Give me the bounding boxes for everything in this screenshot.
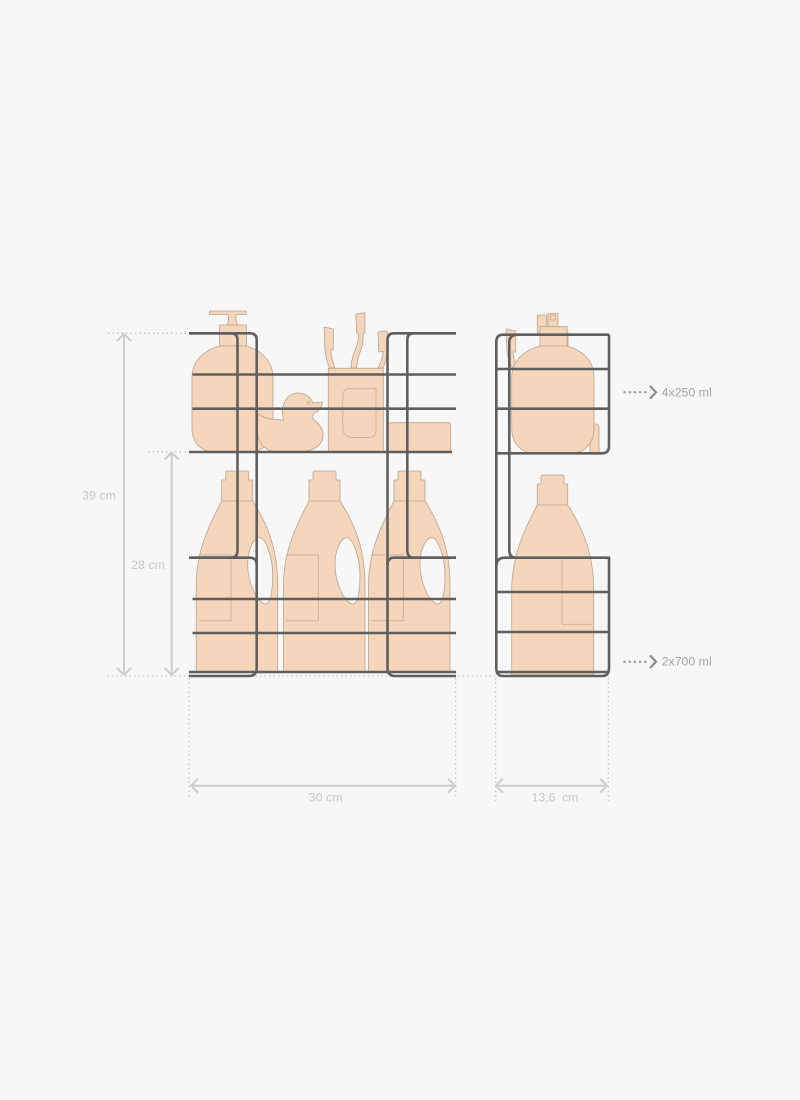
callout: 4x250 ml [624, 386, 712, 399]
icon: soap dispenser [192, 311, 273, 452]
icon: right detergent bottle [368, 471, 450, 672]
icon: side soap dispenser [512, 314, 594, 453]
front view wire rack [189, 333, 456, 676]
icon: side toothbrush and soap [506, 329, 599, 453]
dimension: 13,6 cm depth: 13,6 cm [532, 793, 578, 805]
callout: 2x700 ml [624, 655, 712, 669]
callout: 2x700 ml: 2x700 ml [662, 657, 712, 669]
dimension: 30 cm width: 30 cm [309, 793, 343, 805]
icon: side detergent bottle [512, 475, 594, 675]
extension guide lines [107, 333, 608, 802]
icon: middle detergent bottle [284, 471, 365, 672]
front view contents [192, 311, 451, 672]
side view contents [506, 314, 599, 675]
dimension: 28 cm height [131, 452, 179, 675]
dimension: 30 cm width [191, 779, 455, 805]
dimension: 28 cm height: 28 cm [131, 560, 165, 572]
icon: left detergent bottle [196, 471, 278, 672]
icon: toothbrush cup [324, 313, 387, 452]
dimension: 39 cm height [82, 334, 131, 675]
dimension: 13,6 cm depth [496, 779, 607, 805]
side view wire rack [496, 335, 609, 676]
dimension: 39 cm height: 39 cm [82, 491, 116, 503]
icon: rubber duck [257, 393, 323, 452]
callout: 4x250 ml: 4x250 ml [662, 387, 712, 399]
icon: soap bar [388, 423, 451, 452]
